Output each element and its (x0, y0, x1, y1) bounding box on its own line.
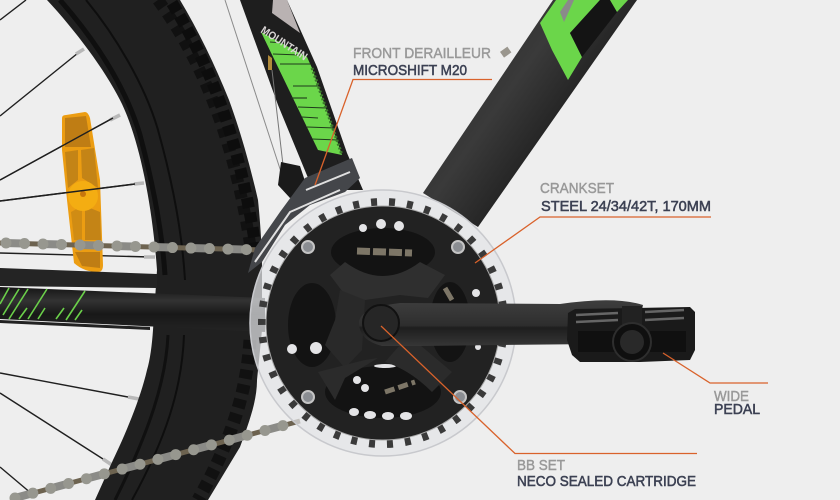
callout: bb set: BB SET (517, 457, 565, 474)
callout: front derailleur: MICROSHIFT M20 (353, 62, 467, 79)
front derailleur (248, 158, 360, 273)
callout: wide pedal (663, 353, 768, 418)
down tube (423, 0, 637, 227)
chainring bolts (302, 241, 466, 403)
callout: crankset: STEEL 24/34/42T, 170MM (541, 198, 711, 215)
crank end cap (363, 305, 399, 341)
callout: front derailleur: FRONT DERAILLEUR (353, 45, 491, 62)
spider arms (318, 262, 452, 400)
chain: upper run (0, 243, 262, 250)
spokes (0, 0, 155, 494)
callout: crankset: CRANKSET (540, 180, 614, 197)
brake cable (225, 0, 282, 175)
rear tire (47, 0, 262, 500)
callout: crankset (475, 180, 711, 263)
decal text: MOUNTAIN (258, 24, 309, 63)
reflector (0, 112, 135, 272)
chainstay tubes (0, 268, 265, 332)
chain seen through windows (357, 251, 452, 392)
pedal (567, 306, 695, 362)
light gaps between inner teeth (287, 219, 481, 420)
chain: lower run (15, 421, 300, 498)
transparent chain guard (250, 190, 516, 456)
callout: bb set: NECO SEALED CARTRIDGE (517, 473, 696, 490)
callout: front derailleur (315, 45, 492, 185)
seat tube with decal (240, 0, 363, 190)
crank arm (359, 300, 643, 346)
callout: bb set (381, 326, 697, 490)
green stripes (0, 288, 85, 320)
inner ring windows (288, 228, 470, 418)
chainring guard and crankset (250, 190, 516, 456)
chainring teeth (262, 202, 504, 444)
chainring body (266, 206, 500, 440)
callout: wide pedal: WIDE (714, 388, 749, 405)
callout: wide pedal: PEDAL (714, 401, 760, 418)
green logo (540, 0, 600, 80)
